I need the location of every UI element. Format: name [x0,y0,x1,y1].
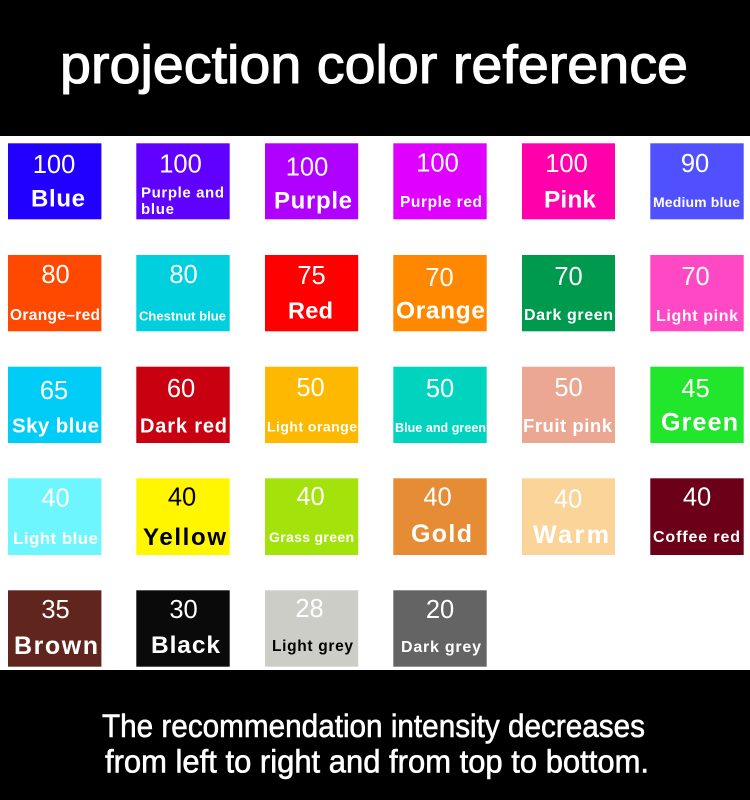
swatch: Sky blue: Sky blue [12,415,99,438]
swatch: Dark green: Dark green [524,307,613,324]
color swatch grid [8,143,744,667]
swatch: Light blue [8,478,101,555]
swatch: Coffee red [650,478,744,555]
swatch: Gold: 40 [423,484,452,512]
swatch: Light blue: 40 [41,485,70,513]
swatch: Dark green: 70 [554,263,583,291]
swatch: Green [650,367,744,443]
swatch: Blue and green [393,367,487,443]
footer band with note [0,670,750,800]
swatch: Blue and green: 50 [426,375,454,403]
swatch: Purple [265,143,358,219]
swatch: Light grey: Light grey [272,638,353,655]
swatch: Purple: 100 [286,154,328,182]
swatch: Coffee red: Coffee red [653,529,740,546]
swatch: Orange: 70 [425,264,454,292]
swatch: Light grey [265,590,358,667]
swatch: Yellow [136,478,230,555]
swatch: Grass green: 40 [296,483,325,511]
swatch: Red: Red [288,298,333,324]
swatch: Light blue: Light blue [13,529,98,548]
swatch: Dark grey [393,590,487,667]
swatch: Purple red: Purple red [400,194,482,211]
swatch: Chestnut blue: Chestnut blue [139,309,226,324]
footer band with note: from left to right and from top to bottom. [105,744,649,780]
swatch: Light pink [650,255,744,331]
swatch: Chestnut blue [136,255,230,331]
swatch: Purple: Purple [274,188,352,215]
swatch: Pink: Pink [544,187,596,214]
swatch: Warm: Warm [533,521,609,549]
swatch: Orange-red [8,255,101,331]
swatch: Gold [393,478,487,555]
swatch: Orange-red: Orange–red [10,307,100,324]
swatch: Dark red: Dark red [140,416,227,438]
swatch: Black: 30 [169,596,198,624]
swatch: Purple and blue: blue [141,201,174,218]
swatch: Brown: 35 [41,596,70,624]
swatch: Light grey: 28 [295,595,324,623]
swatch: Yellow: 40 [168,484,196,512]
swatch: Purple and blue [136,143,230,219]
swatch: Grass green: Grass green [269,529,354,545]
swatch: Light orange [265,367,358,443]
swatch: Green: Green [661,409,738,437]
swatch: Yellow: Yellow [143,524,226,551]
swatch: Orange: Orange [396,298,485,325]
swatch: Blue: 100 [33,151,75,179]
swatch: Brown [8,590,101,667]
swatch: Dark grey: Dark grey [401,639,481,656]
swatch: Gold: Gold [411,520,472,548]
swatch: Red: 75 [297,262,326,290]
swatch: Pink [522,143,615,219]
swatch: Purple and blue: 100 [159,150,202,178]
swatch: Light orange: 50 [296,374,325,402]
swatch: Purple and blue: Purple and [141,185,224,202]
footer band with note: The recommendation intensity decreases [102,708,645,744]
swatch: Fruit pink: 50 [554,374,583,402]
swatch: Light orange: Light orange [267,419,357,435]
swatch: Blue and green: Blue and green [395,421,486,435]
swatch: Blue: Blue [31,186,85,213]
swatch: Dark green [522,255,615,331]
swatch: Chestnut blue: 80 [169,261,198,289]
swatch: Purple red [393,143,487,219]
swatch: Sky blue: 65 [40,377,68,405]
swatch: Green: 45 [681,375,710,403]
swatch: Brown: Brown [14,632,98,660]
swatch: Sky blue [8,367,101,443]
swatch: Medium blue: Medium blue [653,194,740,210]
swatch: Orange-red: 80 [41,261,70,289]
swatch: Purple red: 100 [416,150,459,178]
header band with title: projection color reference [60,35,688,95]
swatch: Light pink: 70 [681,263,710,291]
swatch: Warm: 40 [554,486,582,514]
swatch: Fruit pink: Fruit pink [523,415,613,436]
swatch: Grass green [265,478,358,555]
swatch: Medium blue: 90 [681,150,709,178]
swatch: Warm [522,478,615,555]
swatch: Pink: 100 [545,150,588,178]
header band with title [0,0,750,136]
swatch: Fruit pink [522,367,615,443]
swatch: Black: Black [151,632,220,659]
swatch: Light pink: Light pink [656,308,738,325]
swatch: Coffee red: 40 [683,484,711,512]
swatch: Orange [393,255,487,331]
swatch: Red [265,255,358,331]
swatch: Dark grey: 20 [426,596,454,624]
swatch: Medium blue [650,143,744,219]
swatch: Blue [8,143,101,219]
swatch: Dark red: 60 [167,375,195,403]
swatch: Dark red [136,367,230,443]
swatch: Black [136,590,230,667]
